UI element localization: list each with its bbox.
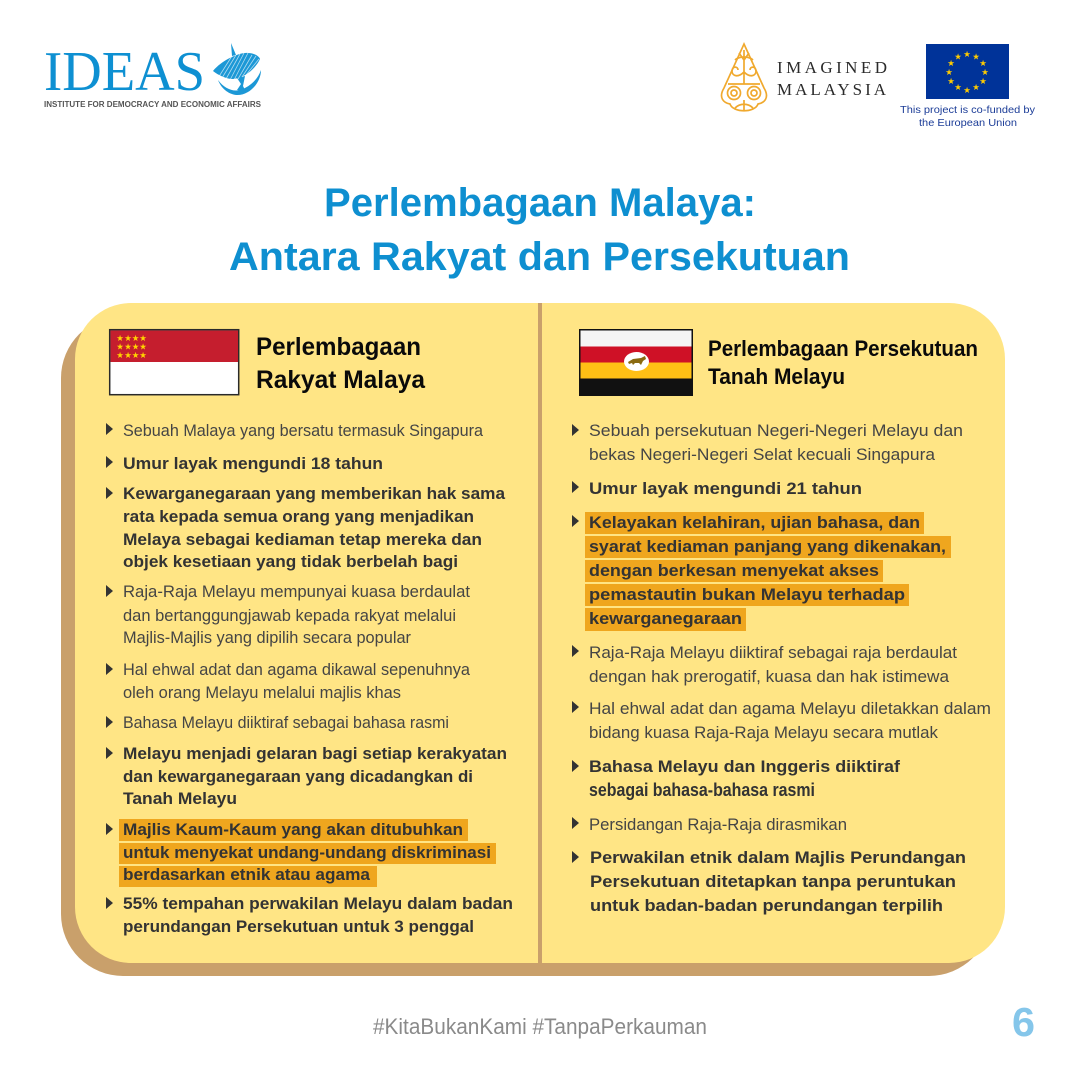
logo: Imagined Malaysia: MALAYSIA bbox=[777, 80, 887, 99]
footer hashtags: #KitaBukanKami #TanpaPerkauman bbox=[373, 1014, 707, 1039]
flag: Rakyat Malaya: ★ bbox=[132, 350, 140, 360]
bullet list: oleh orang Melayu melalui majlis khas bbox=[123, 683, 401, 702]
bullet list: Persidangan Raja-Raja dirasmikan bbox=[589, 815, 847, 834]
logo: IDEAS bbox=[44, 41, 262, 109]
highlighted point: Kelayakan kelahiran: dengan berkesan menyekat akses bbox=[589, 561, 879, 580]
highlighted point: Majlis Kaum-Kaum bbox=[119, 819, 496, 887]
logo: European Union flag: ★ bbox=[972, 52, 980, 62]
book panel bbox=[61, 303, 1005, 976]
logo: European Union flag: ★ bbox=[954, 52, 962, 62]
panel: Perlembagaan Persekutuan Tanah Melayu bbox=[572, 329, 991, 915]
logo: European Union flag: ★ bbox=[945, 67, 953, 77]
flag: Rakyat Malaya: ★ bbox=[139, 342, 147, 352]
heading: Tanah Melayu bbox=[708, 364, 845, 389]
flag: Rakyat Malaya: ★ bbox=[124, 333, 132, 343]
bullet list: bidang kuasa Raja-Raja Melayu secara mutlak bbox=[589, 723, 938, 742]
logo: IDEAS: INSTITUTE FOR DEMOCRACY AND ECONOMIC AFFAIRS bbox=[44, 100, 262, 109]
logo: European Union flag: ★ bbox=[963, 49, 971, 59]
bullet list: Melayu menjadi gelaran bagi setiap kerakyatan bbox=[123, 744, 507, 763]
bullet list: Bahasa Melayu dan Inggeris diiktiraf bbox=[589, 757, 900, 776]
logo: Imagined Malaysia bbox=[722, 44, 887, 111]
bullet list: Perwakilan etnik dalam Majlis Perundangan bbox=[590, 848, 966, 867]
logo: Imagined Malaysia: IMAGINED bbox=[777, 58, 887, 77]
flag: Rakyat Malaya: ★ bbox=[139, 350, 147, 360]
heading bbox=[256, 333, 426, 394]
bullet list: Sebuah Malaya yang bersatu termasuk Singapura bbox=[123, 421, 484, 440]
logo: European Union flag: ★ bbox=[979, 58, 987, 68]
bullet list: dan bertanggungjawab kepada rakyat melalui bbox=[123, 606, 456, 625]
highlighted point: Kelayakan kelahiran: Kelayakan kelahiran, ujian bahasa, dan bbox=[589, 513, 920, 532]
highlighted point: Majlis Kaum-Kaum: berdasarkan etnik atau agama bbox=[123, 865, 371, 884]
logo: European Union flag: ★ bbox=[963, 85, 971, 95]
logo: European Union flag: the European Union bbox=[919, 117, 1017, 129]
bullet list: Sebuah persekutuan Negeri-Negeri Melayu dan bbox=[589, 421, 963, 440]
bullet list: rata kepada semua orang yang menjadikan bbox=[123, 507, 474, 526]
highlighted point: Kelayakan kelahiran: kewarganegaraan bbox=[589, 609, 742, 628]
bullet list: bekas Negeri-Negeri Selat kecuali Singapura bbox=[589, 445, 936, 464]
bullet list: Majlis-Majlis yang dipilih secara popular bbox=[123, 628, 411, 647]
bullet list: Raja-Raja Melayu diiktiraf sebagai raja berdaulat bbox=[589, 643, 957, 662]
flag: Rakyat Malaya: ★ bbox=[132, 342, 140, 352]
logo: European Union flag bbox=[900, 44, 1036, 129]
bullet list: Bahasa Melayu diiktiraf sebagai bahasa rasmi bbox=[123, 713, 449, 732]
bullet list: Tanah Melayu bbox=[123, 789, 237, 808]
bullet list: Kewarganegaraan yang memberikan hak sama bbox=[123, 484, 506, 503]
bullet list: sebagai bahasa-bahasa rasmi bbox=[589, 780, 815, 800]
flag: Rakyat Malaya: ★ bbox=[132, 333, 140, 343]
title: Perlembagaan Malaya: bbox=[324, 181, 756, 225]
flag: Rakyat Malaya bbox=[110, 330, 239, 395]
bullet list: Raja-Raja Melayu mempunyai kuasa berdaulat bbox=[123, 582, 470, 601]
panel: Perlembagaan Rakyat Malaya bbox=[106, 330, 513, 936]
heading bbox=[708, 336, 978, 389]
bullet list: dan kewarganegaraan yang dicadangkan di bbox=[123, 767, 473, 786]
flag: Rakyat Malaya: ★ bbox=[116, 342, 124, 352]
heading: Perlembagaan Persekutuan bbox=[708, 336, 978, 361]
flag: Rakyat Malaya: ★ bbox=[139, 333, 147, 343]
point: 55% reservation bbox=[123, 894, 513, 936]
logo: European Union flag: ★ bbox=[979, 76, 987, 86]
bullet list: Hal ehwal adat dan agama dikawal sepenuhnya bbox=[123, 660, 471, 679]
logo: European Union flag: ★ bbox=[972, 82, 980, 92]
title bbox=[229, 181, 850, 279]
bullet list bbox=[106, 421, 507, 909]
bullet list: objek kesetiaan yang tidak berbelah bagi bbox=[123, 552, 458, 571]
flag: Persekutuan Tanah Melayu bbox=[579, 329, 693, 396]
bullet list: Umur layak mengundi 21 tahun bbox=[589, 479, 862, 498]
point: 55% reservation: 55% tempahan perwakilan Melayu dalam badan bbox=[123, 894, 513, 913]
logo: European Union flag: ★ bbox=[947, 76, 955, 86]
flag: Rakyat Malaya: ★ bbox=[116, 350, 124, 360]
logo: European Union flag: ★ bbox=[947, 58, 955, 68]
flag: Rakyat Malaya: ★ bbox=[116, 333, 124, 343]
highlighted point: Majlis Kaum-Kaum: Majlis Kaum-Kaum yang akan ditubuhkan bbox=[123, 820, 463, 839]
bullet list bbox=[572, 421, 991, 915]
heading: Perlembagaan bbox=[256, 333, 421, 361]
title: Antara Rakyat dan Persekutuan bbox=[229, 235, 850, 279]
bullet list: Hal ehwal adat dan agama Melayu diletakkan dalam bbox=[589, 699, 991, 718]
page number: 6 bbox=[1012, 999, 1035, 1045]
logo: IDEAS: IDEAS bbox=[44, 41, 205, 103]
logo: European Union flag: ★ bbox=[954, 82, 962, 92]
point: 55% reservation: perundangan Persekutuan untuk 3 penggal bbox=[123, 917, 474, 936]
highlighted point: Kelayakan kelahiran: syarat kediaman panjang yang dikenakan, bbox=[589, 537, 946, 556]
highlighted point: Kelayakan kelahiran bbox=[585, 512, 951, 631]
logo: European Union flag: ★ bbox=[981, 67, 989, 77]
heading: Rakyat Malaya bbox=[256, 366, 426, 394]
logo: European Union flag: This project is co-funded by bbox=[900, 104, 1036, 116]
flag: Rakyat Malaya: ★ bbox=[124, 350, 132, 360]
flag: Rakyat Malaya: ★ bbox=[124, 342, 132, 352]
highlighted point: Majlis Kaum-Kaum: untuk menyekat undang-undang diskriminasi bbox=[123, 843, 491, 862]
bullet list: Umur layak mengundi 18 tahun bbox=[123, 454, 383, 473]
highlighted point: Kelayakan kelahiran: pemastautin bukan Melayu terhadap bbox=[589, 585, 905, 604]
bullet list: Persekutuan ditetapkan tanpa peruntukan bbox=[590, 872, 956, 891]
bullet list: dengan hak prerogatif, kuasa dan hak istimewa bbox=[589, 667, 950, 686]
bullet list: Melaya sebagai kediaman tetap mereka dan bbox=[123, 530, 482, 549]
bullet list: untuk badan-badan perundangan terpilih bbox=[590, 896, 943, 915]
